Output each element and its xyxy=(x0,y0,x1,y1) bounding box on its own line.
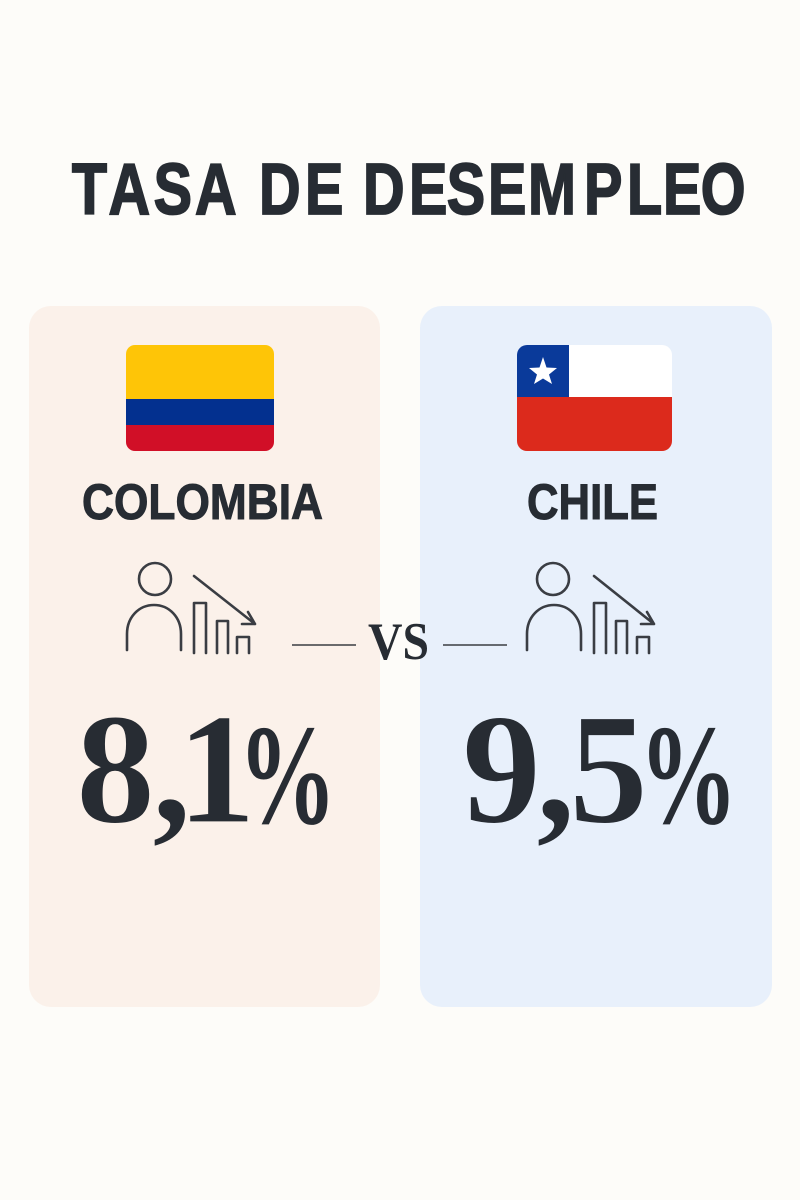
country name: Chile: CHILE xyxy=(527,474,658,530)
country name: Colombia: COLOMBIA xyxy=(82,474,323,530)
value: Colombia: % xyxy=(238,696,337,854)
value: Chile: % xyxy=(639,696,738,854)
icon: person with falling bars xyxy=(527,563,654,653)
value: Colombia: 8,1 xyxy=(76,682,256,857)
value: Chile xyxy=(462,682,738,857)
icon: person with falling bars xyxy=(127,563,255,653)
value: Colombia xyxy=(76,682,337,857)
flag: Chile xyxy=(517,345,672,451)
vs label: VS xyxy=(368,613,429,671)
flag: Colombia xyxy=(126,345,274,451)
value: Chile: 9,5 xyxy=(462,682,648,857)
panel: Chile xyxy=(420,306,772,1007)
panel: Colombia xyxy=(29,306,380,1007)
icon: star xyxy=(529,357,557,384)
title: TASA DE DESEMPLEO xyxy=(72,149,746,229)
